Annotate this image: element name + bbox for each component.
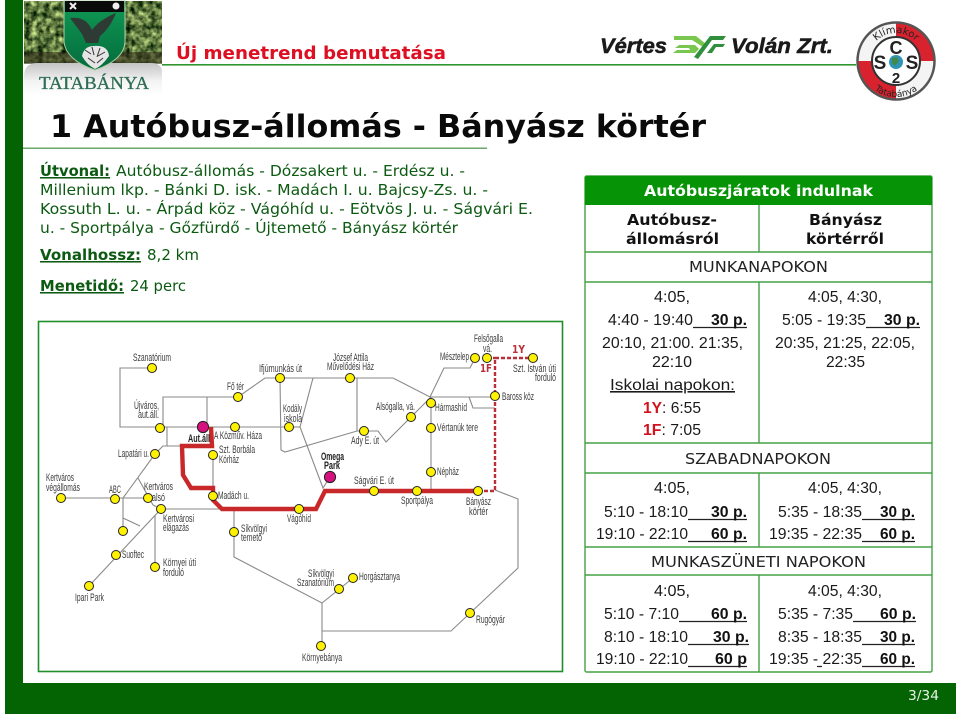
logo: Klímakor CO2 SOS lifebuoy: S — [906, 53, 918, 74]
map: stop labels: Aut.áll — [188, 433, 210, 445]
timetable: column heading from Bányász körtér: körtérről — [806, 230, 884, 248]
map: stop labels: Újváros, — [134, 399, 159, 412]
timetable: holidays heading: MUNKASZÜNETI NAPOKON — [651, 552, 866, 571]
timetable: column heading from bus station — [626, 211, 719, 248]
timetable: Saturdays from Bányász körtér — [769, 480, 915, 543]
timetable: workdays from Bányász körtér: 5:05 - 19:35 — [782, 312, 866, 329]
timetable: workdays from bus station: 4:40 - 19:40 — [608, 312, 693, 329]
logo: Klímakor CO2 SOS lifebuoy: Tatabánya — [876, 84, 917, 98]
timetable: workdays heading: MUNKANAPOKON — [689, 258, 828, 276]
logo wordmark: TATABÁNYA — [39, 72, 149, 93]
map: stop labels: Park — [324, 460, 341, 472]
map: stop labels: Környebánya — [302, 652, 343, 664]
map: stop labels: körtér — [469, 506, 488, 518]
map: stop labels: elágazás — [163, 522, 189, 534]
logo: Klímakor CO2 SOS lifebuoy: 2 — [892, 70, 900, 87]
timetable: workdays from bus station: 22:10 — [652, 354, 692, 371]
timetable: holidays from bus station: 8:10 - 18:10 — [604, 629, 688, 646]
map: stop labels: forduló — [163, 567, 184, 579]
timetable: holidays from bus station: 60 p — [715, 651, 747, 668]
timetable: holidays from bus station: 5:10 - 7:10 — [604, 606, 679, 623]
timetable: workdays from bus station: 30 p. — [711, 312, 747, 329]
map: stop labels: Ady E. út — [351, 435, 379, 447]
timetable: header: Autóbuszjáratok indulnak — [644, 182, 874, 200]
timetable: workdays from bus station: Iskolai napokon: — [610, 377, 735, 394]
route description: Útvonal: — [40, 161, 110, 180]
timetable: holidays from Bányász körtér: 30 p. — [880, 629, 915, 646]
map: stop labels: Síkvölgyi — [241, 523, 267, 535]
map: stop labels: Madách u. — [218, 490, 249, 502]
map: stop labels: ABC — [109, 484, 121, 496]
map: stop labels: Szanatórium — [133, 352, 171, 364]
timetable: Saturdays from bus station: 4:05, — [654, 480, 690, 497]
map: stop labels: Fő tér — [227, 381, 244, 393]
map: stop labels: Szt. István úti — [513, 363, 556, 375]
timetable: column heading from Bányász körtér: Bányász — [809, 211, 882, 229]
route length: 8,2 km — [147, 246, 199, 264]
timetable: Saturdays heading: SZABADNAPOKON — [685, 450, 831, 468]
map: stops — [56, 354, 538, 650]
timetable: column heading from bus station: állomásról — [626, 230, 719, 248]
map: branch labels: 1F — [480, 363, 492, 375]
route description — [40, 161, 533, 295]
map: stop labels: Kertváros — [46, 472, 74, 484]
map: stop labels: Sportpálya — [401, 495, 434, 507]
map: terminus markers — [197, 421, 336, 483]
timetable: holidays from Bányász körtér: 60 p. — [880, 651, 915, 668]
map: stop labels: Ipari Park — [75, 592, 104, 604]
logo: Klímakor CO2 SOS lifebuoy: S — [874, 53, 886, 74]
route length: Vonalhossz: — [40, 246, 141, 264]
timetable panel — [585, 176, 932, 672]
map: stop labels: Ifjúmunkás út — [259, 363, 302, 375]
timetable: workdays from bus station: 1Y: 6:55 — [643, 400, 701, 417]
timetable: workdays from bus station: 20:10, 21:00. 21:35, — [602, 335, 743, 352]
timetable: workdays from bus station: 1F: 7:05 — [643, 422, 701, 439]
map: stop labels: Kodály — [283, 403, 302, 415]
map: stop labels: Suoftec — [122, 549, 144, 561]
map: stop labels: Rugógyár — [476, 614, 505, 626]
route description: Kossuth L. u. - Árpád köz - Vágóhíd u. - Eötvös J. u. - Ságvári E. — [40, 199, 533, 218]
timetable: Saturdays from Bányász körtér: 4:05, 4:30, — [808, 480, 882, 497]
logo: Klímakor CO2 SOS lifebuoy: Klímakor — [872, 26, 920, 40]
map: stop labels: alsó — [152, 492, 165, 504]
map: stop labels: Hármashíd — [435, 402, 467, 414]
map: stop labels: Népház — [437, 466, 459, 478]
map: stop labels: A Közműv. Háza — [214, 430, 263, 442]
logo: Vértes Volán: Vértes — [600, 35, 667, 58]
logo: Tatabánya coat of arms — [24, 1, 162, 95]
map: stop labels: Síkvölgyi — [308, 568, 334, 580]
timetable: Saturdays from bus station: 60 p. — [711, 526, 747, 543]
logo: Klímakor CO2 SOS lifebuoy — [856, 21, 936, 101]
map: stop labels — [46, 333, 556, 664]
map: stop labels: Omega — [321, 451, 345, 463]
timetable: holidays from Bányász körtér: 19:35 - 22:35 — [769, 651, 862, 668]
map: stop labels: Vágóhíd — [287, 513, 311, 525]
map: stop labels: József Attila — [333, 352, 369, 364]
timetable: workdays from Bányász körtér: 4:05, 4:30, — [808, 289, 882, 306]
timetable: holidays from Bányász körtér: 4:05, 4:30, — [808, 583, 882, 600]
timetable: workdays from bus station — [602, 289, 747, 439]
route duration: Menetidő: — [40, 277, 124, 295]
timetable: header — [585, 176, 932, 205]
map: line 1 route — [182, 427, 478, 509]
logo: Vértes Volán: Volán Zrt. — [731, 35, 833, 58]
timetable: Saturdays from Bányász körtér: 5:35 - 18:35 — [778, 504, 862, 521]
timetable: workdays from Bányász körtér: 20:35, 21:25, 22:05, — [775, 335, 915, 352]
map: stop labels: Kórház — [219, 454, 239, 466]
map: stop labels: Kertvárosi — [163, 513, 194, 525]
header rule — [162, 64, 856, 66]
timetable: holidays from Bányász körtér: 5:35 - 7:35 — [778, 606, 853, 623]
route duration — [40, 277, 186, 295]
timetable: Saturdays from Bányász körtér: 30 p. — [880, 504, 915, 521]
map: stop labels: temető — [241, 532, 262, 544]
map: stop labels: Környei úti — [163, 557, 196, 569]
timetable: holidays from bus station: 19:10 - 22:10 — [596, 651, 688, 668]
map: stop labels: Bányász — [466, 496, 491, 508]
title: 1 Autóbusz-állomás - Bányász körtér — [50, 109, 707, 145]
map: stop labels: Horgásztanya — [359, 571, 401, 583]
logo: Klímakor CO2 SOS lifebuoy: C — [890, 38, 902, 58]
map: stop labels: forduló — [535, 372, 556, 384]
route description: u. - Sportpálya - Gőzfürdő - Újtemető - Bányász körtér — [40, 218, 459, 237]
map: branch labels — [480, 344, 525, 375]
timetable: Saturdays from bus station: 30 p. — [711, 504, 747, 521]
timetable: column heading from bus station: Autóbusz- — [627, 211, 717, 229]
heading: new timetable: Új menetrend bemutatása — [176, 42, 446, 64]
timetable: workdays from bus station: 4:05, — [654, 289, 690, 306]
map: school-day branch 1Y and 1F — [478, 358, 533, 491]
timetable: workdays from Bányász körtér: 30 p. — [884, 312, 920, 329]
timetable: holidays from bus station: 30 p. — [713, 629, 749, 646]
timetable: column heading from Bányász körtér — [806, 211, 884, 248]
map: stop labels: Szanatórium — [297, 577, 334, 589]
timetable: Saturdays from bus station: 5:10 - 18:10 — [604, 504, 688, 521]
page number: 3/34 — [908, 689, 939, 704]
map: stop labels: Kertváros — [144, 481, 173, 493]
timetable: Saturdays from Bányász körtér: 60 p. — [880, 526, 915, 543]
map: stop labels: Baross köz — [502, 391, 534, 403]
map: stop labels: Művelődési Ház — [327, 361, 374, 373]
timetable: holidays from Bányász körtér: 60 p. — [880, 606, 916, 623]
timetable: Saturdays from Bányász körtér: 19:35 - 22:35 — [769, 526, 862, 543]
timetable: grid — [585, 176, 932, 672]
map: stop labels: Alsógalla, vá. — [376, 401, 415, 413]
map: stop labels: Ságvári E. út — [354, 475, 394, 487]
route duration: 24 perc — [130, 277, 186, 295]
map: stop labels: Lapatári u. — [118, 448, 149, 460]
timetable: workdays from Bányász körtér — [775, 289, 920, 371]
map: stop labels: Szt. Borbála — [219, 444, 256, 456]
timetable: holidays from bus station — [596, 583, 749, 668]
map: stop labels: végállomás — [46, 482, 80, 494]
route length — [40, 246, 199, 264]
map: stop labels: vá. — [483, 343, 492, 355]
timetable: Saturdays from bus station: 19:10 - 22:10 — [596, 526, 688, 543]
map: stop labels: Mésztelep — [440, 351, 469, 363]
map: branch labels: 1Y — [512, 344, 525, 356]
map panel — [38, 322, 562, 672]
logo: Vértes Volán — [600, 35, 833, 59]
footer bar — [5, 683, 956, 714]
timetable: Saturdays from bus station — [596, 480, 747, 543]
map: stop labels: Vértanúk tere — [437, 422, 478, 434]
timetable: holidays from Bányász körtér — [769, 583, 916, 668]
timetable: workdays from Bányász körtér: 22:35 — [826, 354, 865, 371]
frame: left bar — [5, 0, 23, 684]
map: stop labels: Felsőgalla — [474, 333, 504, 345]
route description: Millenium lkp. - Bánki D. isk. - Madách I. u. Bajcsy-Zs. u. - — [40, 181, 488, 199]
map: network lines — [61, 358, 518, 646]
timetable: holidays from Bányász körtér: 8:35 - 18:35 — [778, 629, 862, 646]
map: stop labels: aut.áll. — [138, 409, 159, 421]
timetable: holidays from bus station: 4:05, — [654, 583, 690, 600]
map: stop labels: iskola — [284, 413, 303, 425]
timetable: holidays from bus station: 60 p. — [711, 606, 747, 623]
route description: Autóbusz-állomás - Dózsakert u. - Erdész u. - — [116, 162, 465, 180]
title rule — [23, 148, 487, 149]
